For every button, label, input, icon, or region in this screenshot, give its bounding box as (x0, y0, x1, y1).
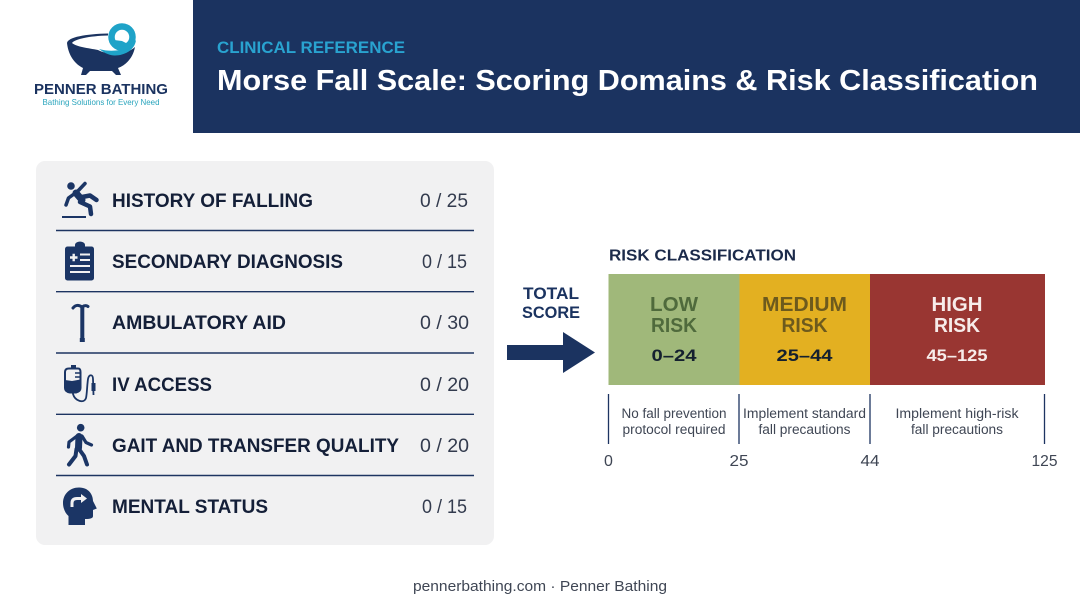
row: history of falling: 0 / 25 (420, 191, 468, 212)
segment: high risk: 45–125 (926, 347, 988, 365)
row: ambulatory aid: 0 / 30 (420, 313, 469, 334)
segment: low risk: 0–24 (652, 347, 697, 365)
risk bar (608, 274, 1045, 385)
segment: high risk: RISK (934, 315, 981, 337)
segment: high risk: HIGH (932, 294, 982, 316)
header eyebrow: CLINICAL REFERENCE (217, 38, 405, 57)
icon: cane (73, 305, 88, 342)
icon: walking person (68, 424, 92, 464)
icon: iv bag (65, 365, 96, 401)
row: gait and transfer quality (68, 424, 469, 464)
segment: high risk (870, 274, 1045, 385)
scale numbers: 25 (730, 453, 749, 470)
scale ticks (608, 394, 1044, 444)
icon: bathtub with wave (67, 26, 136, 75)
segment: medium risk (740, 274, 870, 385)
row: gait and transfer quality: 0 / 20 (420, 436, 469, 457)
row: secondary diagnosis: 0 / 15 (422, 252, 467, 273)
row: iv access: IV ACCESS (112, 375, 212, 396)
low risk description: protocol required (622, 422, 726, 437)
segment: medium risk: RISK (782, 315, 828, 337)
row: mental status: MENTAL STATUS (112, 497, 268, 518)
scale numbers (604, 453, 1058, 470)
high risk description: Implement high-risk (896, 406, 1019, 421)
segment: low risk (608, 274, 740, 385)
title: Morse Fall Scale: Scoring Domains & Risk Classification (217, 65, 1038, 97)
row: ambulatory aid (73, 305, 469, 342)
logo name: PENNER BATHING (34, 81, 168, 98)
scale numbers: 125 (1032, 453, 1058, 470)
segment: low risk: RISK (651, 315, 698, 337)
row: mental status (63, 488, 467, 525)
footer: pennerbathing.com · Penner Bathing (413, 579, 667, 595)
segment: medium risk: 25–44 (776, 347, 833, 365)
total score label: TOTAL (523, 285, 579, 303)
row: gait and transfer quality: GAIT AND TRANSFER QUALITY (112, 436, 399, 457)
low risk description: No fall prevention (622, 406, 726, 421)
icon: falling person (62, 182, 96, 218)
medium risk description: Implement standard (743, 406, 866, 421)
row: ambulatory aid: AMBULATORY AID (112, 313, 286, 334)
segment: low risk: LOW (650, 294, 698, 316)
arrow (507, 332, 595, 373)
scale numbers: 44 (860, 453, 880, 470)
risk classification heading: RISK CLASSIFICATION (609, 248, 796, 264)
segment: medium risk: MEDIUM (762, 294, 847, 316)
row: mental status: 0 / 15 (422, 497, 467, 518)
medium risk description: fall precautions (758, 422, 851, 437)
logo tagline: Bathing Solutions for Every Need (42, 97, 160, 107)
icon: head with arrow (63, 488, 97, 525)
scale numbers: 0 (604, 453, 613, 470)
icon: clipboard (65, 242, 94, 280)
row: history of falling (62, 182, 468, 218)
row: iv access: 0 / 20 (420, 375, 469, 396)
row: history of falling: HISTORY OF FALLING (112, 191, 313, 212)
header banner (193, 0, 1080, 133)
row: iv access (65, 365, 469, 401)
row: secondary diagnosis (65, 242, 467, 280)
row: secondary diagnosis: SECONDARY DIAGNOSIS (112, 252, 343, 273)
panel: scoring domains (36, 161, 494, 545)
high risk description: fall precautions (911, 422, 1003, 437)
logo (34, 26, 168, 107)
total score label: SCORE (522, 304, 580, 322)
